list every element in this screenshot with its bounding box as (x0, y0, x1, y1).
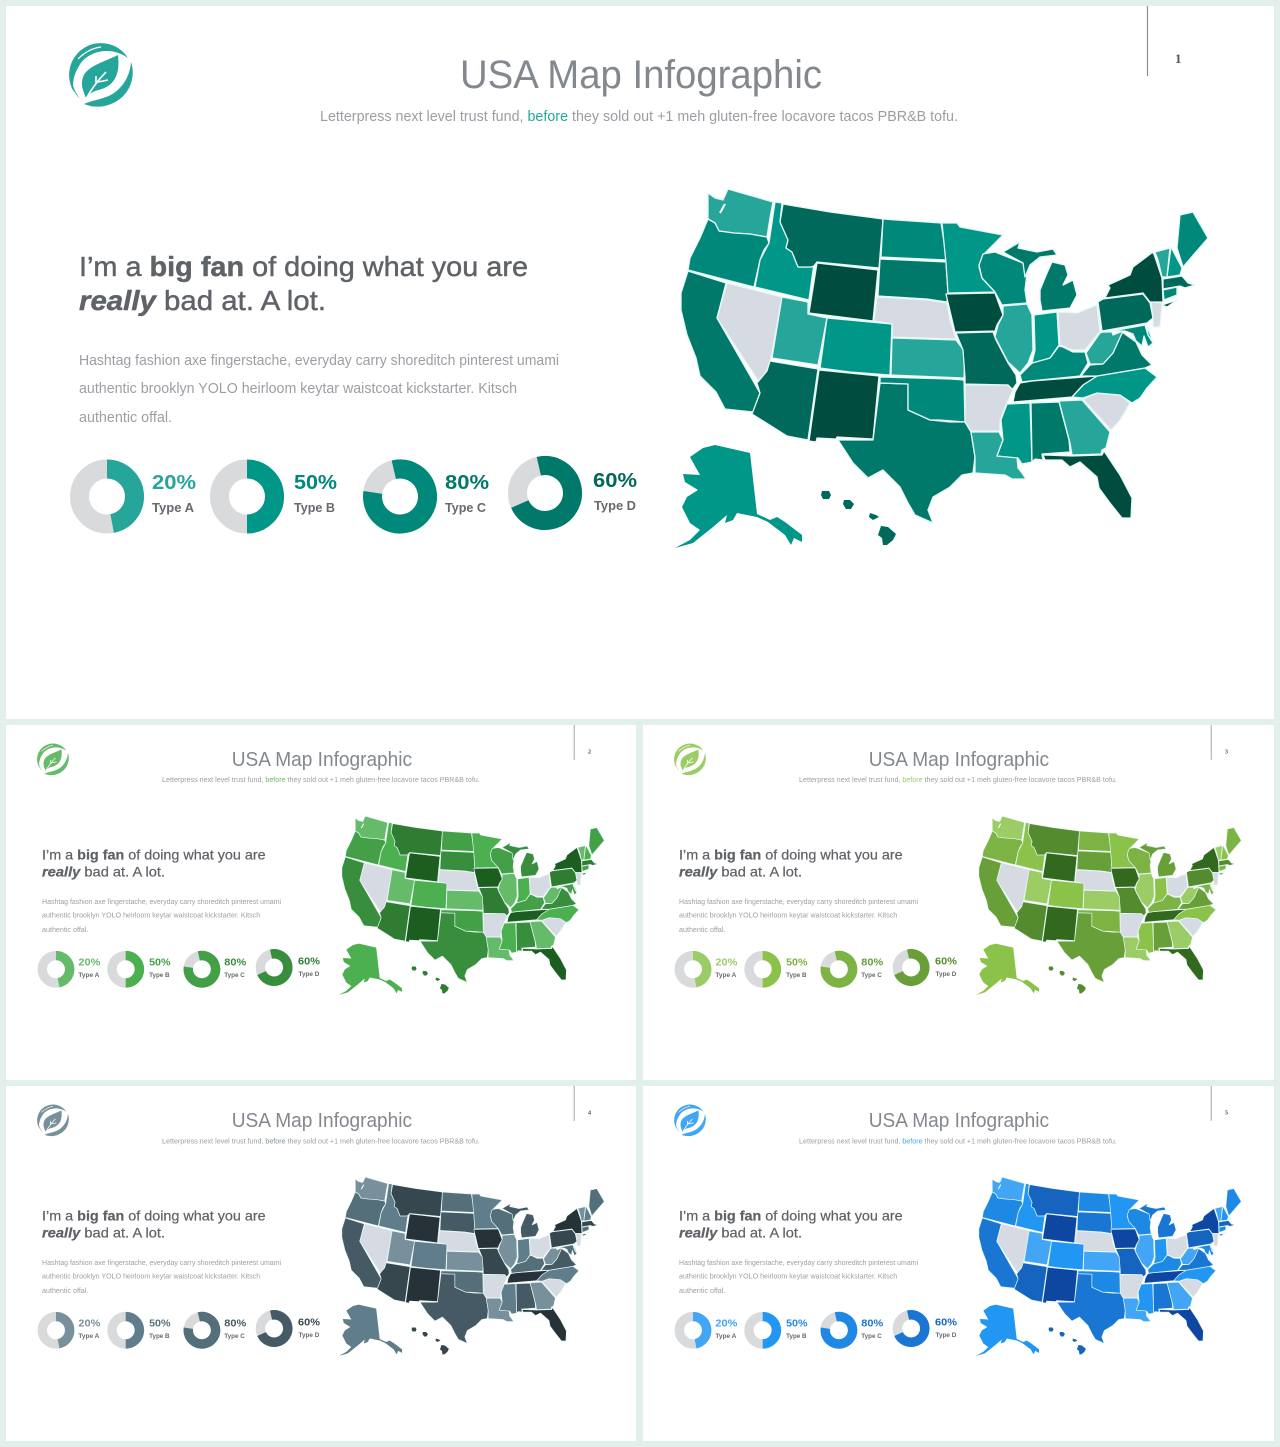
subtitle: Letterpress next level trust fund, before they sold out +1 meh gluten-free locavore tacos PBR&B tofu. (162, 775, 480, 784)
title: USA Map Infographic (869, 1110, 1049, 1132)
donut: Type A: 20% (78, 1319, 100, 1330)
donut: Type C (185, 1314, 246, 1347)
donut: Type B (749, 956, 808, 983)
USA map (675, 189, 1208, 548)
donut: Type A: Type A (152, 500, 195, 515)
page number marker: 4 (588, 1109, 592, 1116)
donut: Type C: Type C (861, 1333, 882, 1340)
heading: I’m a big fan of doing what you are (679, 846, 903, 862)
donut: Type B: Type B (149, 972, 170, 979)
donut: Type D (512, 460, 637, 526)
heading: I’m a big fan of doing what you are (679, 1207, 903, 1223)
title: USA Map Infographic (232, 749, 412, 771)
page number marker: 1 (1175, 51, 1182, 66)
donut: Type B (749, 1317, 808, 1344)
USA map (339, 1177, 604, 1356)
donut: Type B: 50% (149, 958, 171, 969)
donut: Type C: 80% (224, 1319, 246, 1330)
donut: Type C (822, 1314, 883, 1347)
icon: leaf logo (37, 1104, 69, 1136)
panel: main teal slide (69, 6, 1208, 548)
body text: Hashtag fashion axe fingerstache, everyday carry shoreditch pinterest umami (42, 897, 281, 906)
donut: Type A: Type A (715, 1333, 737, 1340)
donut: Type A: Type A (78, 1333, 100, 1340)
donut: Type C (822, 953, 883, 986)
subtitle: Letterpress next level trust fund, before they sold out +1 meh gluten-free locavore tacos PBR&B tofu. (320, 109, 958, 125)
panel: blue slide (674, 1086, 1241, 1356)
body text: authentic brooklyn YOLO heirloom keytar waistcoat kickstarter. Kitsch (42, 911, 260, 920)
subtitle: Letterpress next level trust fund, before they sold out +1 meh gluten-free locavore tacos PBR&B tofu. (799, 1136, 1117, 1145)
heading (42, 846, 266, 879)
heading (79, 251, 528, 316)
donut: Type A (42, 1317, 100, 1344)
page number marker (574, 725, 591, 760)
body text (42, 1258, 281, 1295)
body text: authentic brooklyn YOLO heirloom keytar waistcoat kickstarter. Kitsch (679, 1272, 897, 1281)
body text: Hashtag fashion axe fingerstache, everyday carry shoreditch pinterest umami (42, 1258, 281, 1267)
heading: really bad at. A lot. (42, 1224, 165, 1240)
page number marker (574, 1086, 592, 1121)
donut: Type B: 50% (294, 472, 337, 494)
donut: Type D (258, 951, 320, 984)
heading: I’m a big fan of doing what you are (42, 846, 266, 862)
USA map (976, 1177, 1241, 1356)
donut: Type D: 60% (298, 957, 320, 968)
donut: Type B: 50% (786, 1319, 808, 1330)
body text (679, 897, 918, 934)
USA map (976, 816, 1241, 995)
body text: Hashtag fashion axe fingerstache, everyday carry shoreditch pinterest umami (679, 897, 918, 906)
body text: Hashtag fashion axe fingerstache, everyday carry shoreditch pinterest umami (679, 1258, 918, 1267)
body text: authentic offal. (42, 1286, 88, 1295)
donut: Type D: 60% (935, 1318, 957, 1329)
donut: Type C: Type C (224, 972, 245, 979)
donut: Type D: Type D (936, 971, 957, 978)
donut: Type B: 50% (149, 1319, 171, 1330)
body text (79, 353, 559, 426)
donut: Type B: 50% (786, 958, 808, 969)
donut: Type C: 80% (861, 958, 883, 969)
title: USA Map Infographic (460, 53, 822, 97)
heading: I’m a big fan of doing what you are (42, 1207, 266, 1223)
body text: authentic brooklyn YOLO heirloom keytar waistcoat kickstarter. Kitsch (42, 1272, 260, 1281)
heading: I’m a big fan of doing what you are (79, 251, 528, 282)
page number marker (1148, 6, 1182, 76)
donut: Type A: 20% (78, 958, 100, 969)
heading: really bad at. A lot. (679, 1224, 802, 1240)
body text: authentic offal. (42, 925, 88, 934)
page number marker: 5 (1225, 1109, 1228, 1116)
donut: Type A: Type A (78, 972, 100, 979)
heading (679, 1207, 903, 1240)
donut: Type B: Type B (786, 972, 807, 979)
panel: green slide (37, 725, 604, 995)
subtitle: Letterpress next level trust fund, before they sold out +1 meh gluten-free locavore tacos PBR&B tofu. (162, 1136, 480, 1145)
body text: Hashtag fashion axe fingerstache, everyday carry shoreditch pinterest umami (79, 353, 559, 369)
donut: Type B (112, 956, 171, 983)
donut: Type A (80, 469, 196, 524)
page number marker: 2 (588, 748, 591, 755)
donut: Type C: Type C (224, 1333, 245, 1340)
icon: leaf logo (674, 743, 706, 775)
page number marker: 3 (1225, 748, 1229, 755)
donut: Type C: 80% (224, 958, 246, 969)
heading (42, 1207, 266, 1240)
body text: authentic offal. (679, 1286, 725, 1295)
donut: Type D: Type D (594, 498, 636, 513)
donut: Type D: 60% (298, 1318, 320, 1329)
body text: authentic brooklyn YOLO heirloom keytar waistcoat kickstarter. Kitsch (79, 381, 517, 397)
donut: Type B: Type B (294, 500, 335, 515)
donut: Type D: 60% (593, 470, 637, 492)
donut: Type D: 60% (935, 957, 957, 968)
USA map (339, 816, 604, 995)
subtitle: Letterpress next level trust fund, before they sold out +1 meh gluten-free locavore tacos PBR&B tofu. (799, 775, 1117, 784)
icon: leaf logo (69, 43, 133, 107)
title: USA Map Infographic (869, 749, 1049, 771)
panel: light green slide (674, 725, 1241, 995)
donut: Type A: Type A (715, 972, 737, 979)
donut: Type B: Type B (149, 1333, 170, 1340)
heading: really bad at. A lot. (42, 863, 165, 879)
donut: Type A: 20% (715, 1319, 737, 1330)
donut: Type C: Type C (861, 972, 882, 979)
donut: Type A (679, 956, 737, 983)
donut: Type D (895, 1312, 957, 1345)
donut: Type D (258, 1312, 320, 1345)
donut: Type D: Type D (299, 1332, 320, 1339)
donut: Type B: Type B (786, 1333, 807, 1340)
donut: Type C: 80% (861, 1319, 883, 1330)
heading: really bad at. A lot. (79, 285, 326, 316)
donut: Type C: Type C (445, 500, 487, 515)
body text (42, 897, 281, 934)
title: USA Map Infographic (232, 1110, 412, 1132)
page number marker (1211, 725, 1229, 760)
donut: Type D (895, 951, 957, 984)
body text (679, 1258, 918, 1295)
donut: Type C (185, 953, 246, 986)
donut: Type A (42, 956, 100, 983)
body text: authentic offal. (679, 925, 725, 934)
donut: Type D: Type D (299, 971, 320, 978)
donut: Type B (220, 469, 337, 524)
donut: Type C (367, 464, 489, 529)
donut: Type C: 80% (445, 472, 489, 494)
donut: Type A (679, 1317, 737, 1344)
body text: authentic brooklyn YOLO heirloom keytar waistcoat kickstarter. Kitsch (679, 911, 897, 920)
heading: really bad at. A lot. (679, 863, 802, 879)
heading (679, 846, 903, 879)
icon: leaf logo (674, 1104, 706, 1136)
panel: slate slide (37, 1086, 604, 1356)
donut: Type B (112, 1317, 171, 1344)
donut: Type D: Type D (936, 1332, 957, 1339)
icon: leaf logo (37, 743, 69, 775)
page number marker (1211, 1086, 1228, 1121)
donut: Type A: 20% (715, 958, 737, 969)
donut: Type A: 20% (152, 472, 196, 494)
body text: authentic offal. (79, 410, 172, 426)
